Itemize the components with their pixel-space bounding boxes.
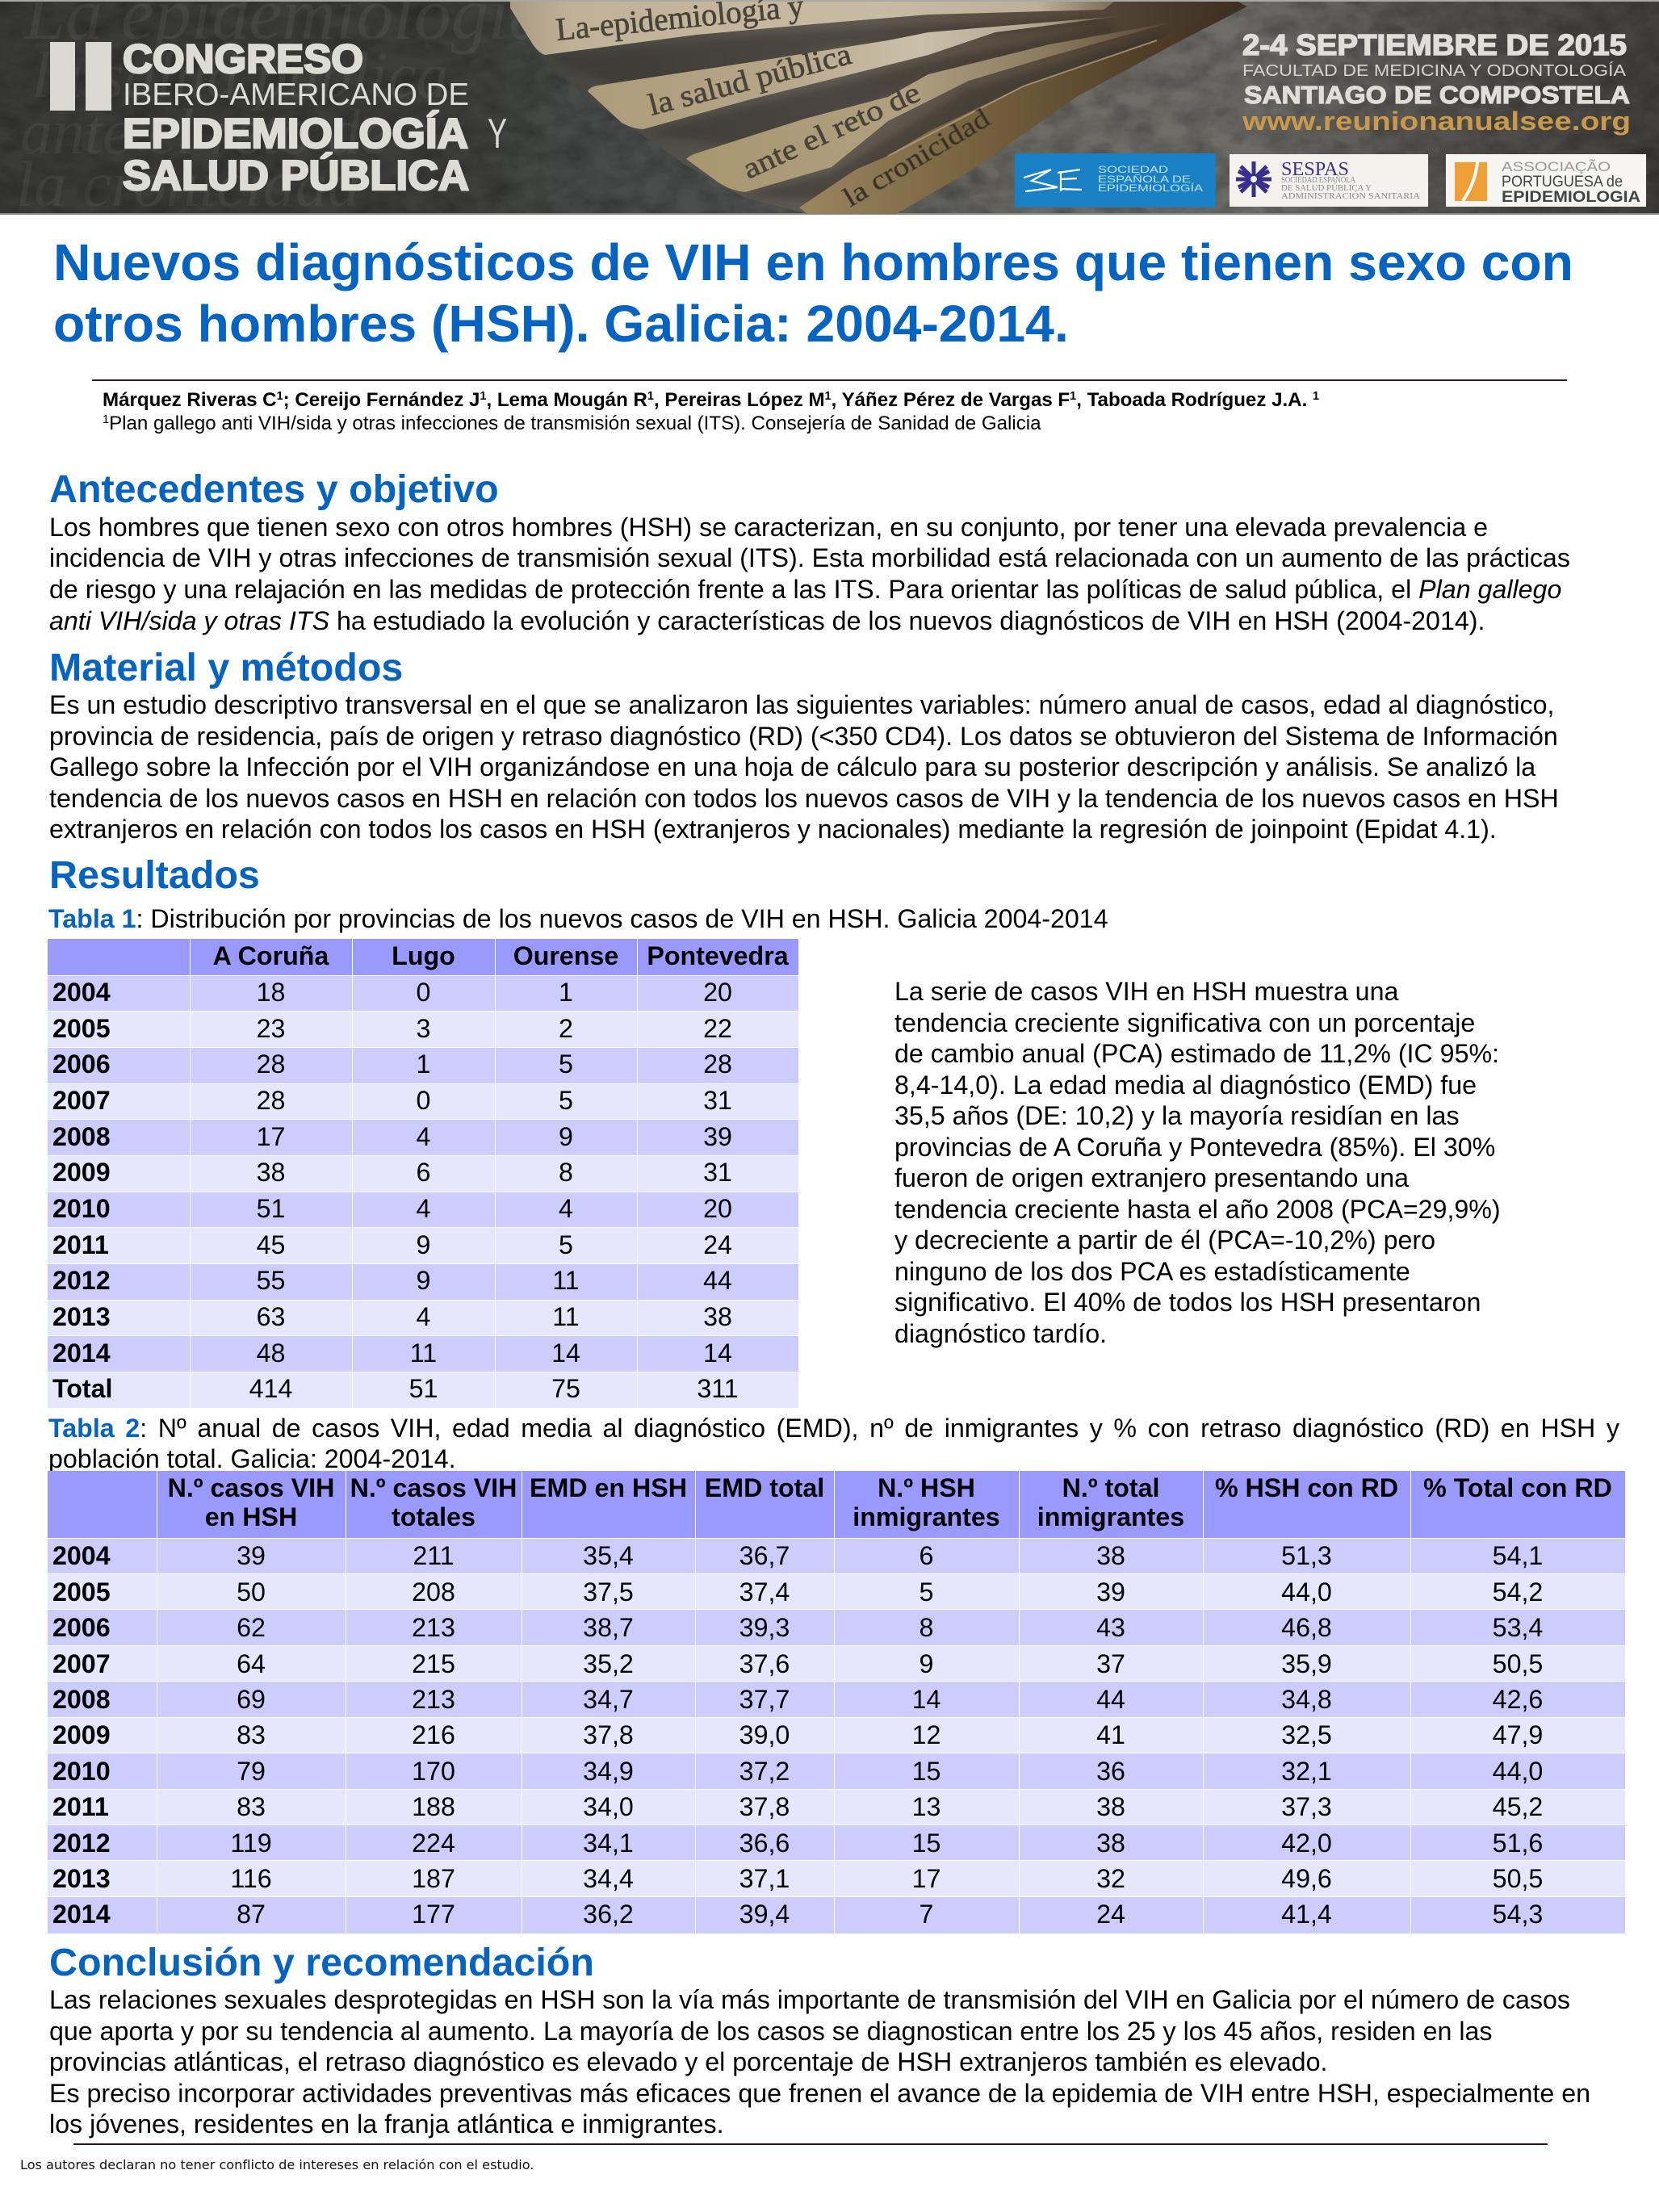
table 1: provinces: 2 xyxy=(559,1014,573,1043)
table 1: provinces: 4 xyxy=(559,1194,573,1223)
table 1: provinces: 51 xyxy=(409,1374,438,1403)
table 2: annual cases: 37,3 xyxy=(1281,1792,1332,1821)
authors and affiliation: 1 xyxy=(647,390,654,403)
table 2: annual cases: N.º casos VIH xyxy=(168,1473,334,1502)
table 2: annual cases: 2005 xyxy=(52,1577,111,1607)
table 2: annual cases: 187 xyxy=(412,1864,455,1893)
table 2: annual cases: 213 xyxy=(412,1685,455,1714)
text: resultados summary xyxy=(894,977,1501,1348)
table 2: annual cases: 54,2 xyxy=(1493,1577,1543,1607)
authors and affiliation xyxy=(92,379,1567,434)
authors and affiliation: 1 xyxy=(825,390,832,403)
table 2: annual cases: 32,5 xyxy=(1281,1720,1332,1749)
table 2: annual cases: EMD total xyxy=(705,1473,824,1502)
text: material y métodos: provincia de residencia, país de origen y retraso diagnóstico (RD) (<350 CD4). Los datos se obtuvieron del Sistema de Información xyxy=(49,722,1558,751)
table 1: provinces: Ourense xyxy=(513,941,618,970)
text: conclusión: Es preciso incorporar actividades preventivas más eficaces que frenen el avance de la epidemia de VIH entre HSH, especialmente en xyxy=(49,2079,1590,2108)
table 1: provinces: 414 xyxy=(249,1374,292,1403)
logo: APE xyxy=(1446,154,1646,207)
logo: SESPAS: SOCIEDAD ESPAÑOLA xyxy=(1281,175,1355,185)
table 1: provinces: 9 xyxy=(559,1122,573,1151)
table 1: provinces: 44 xyxy=(703,1266,732,1295)
table 2: annual cases: 39,0 xyxy=(739,1720,790,1749)
table 2: annual cases: 24 xyxy=(1096,1900,1125,1929)
table 1: provinces: 4 xyxy=(417,1194,430,1223)
table 2: annual cases: EMD en HSH xyxy=(530,1473,687,1502)
table 1: provinces: 48 xyxy=(257,1339,285,1368)
text: antecedentes: de riesgo y una relajación en las medidas de protección frente a las ITS. Para orientar las políticas de salud pública, el Plan gallego xyxy=(49,575,1561,604)
congress name: CONGRESO xyxy=(123,36,363,82)
table 1: provinces: 2014 xyxy=(52,1339,111,1368)
authors and affiliation: Márquez Riveras C xyxy=(103,389,277,411)
table 1: provinces: 20 xyxy=(703,1194,732,1223)
table 2: annual cases: 39,3 xyxy=(739,1613,790,1642)
table 2: annual cases: 54,1 xyxy=(1493,1541,1543,1570)
table 2: annual cases: 211 xyxy=(413,1541,455,1570)
table 1: provinces: 24 xyxy=(703,1230,732,1259)
table 1: provinces: 9 xyxy=(417,1266,430,1295)
table 2: annual cases: 36,2 xyxy=(583,1900,634,1929)
table 2: annual cases: 215 xyxy=(412,1649,455,1678)
table 2: annual cases: 39 xyxy=(1096,1577,1125,1607)
background script lettering xyxy=(16,0,547,220)
table 2: annual cases: 37,4 xyxy=(739,1577,790,1607)
table 2: annual cases: 32,1 xyxy=(1281,1757,1332,1786)
table 1: provinces: 2006 xyxy=(52,1049,111,1079)
table 1: provinces: Pontevedra xyxy=(647,941,789,970)
table 1: provinces: 5 xyxy=(559,1230,573,1259)
table 1: provinces: 2007 xyxy=(52,1086,111,1115)
table 1: provinces: 3 xyxy=(417,1014,430,1043)
authors and affiliation: 1 xyxy=(103,413,109,426)
caption: Tabla 2: Tabla 2: Nº anual de casos VIH, edad media al diagnóstico (EMD), nº de inmigrantes y % con retraso diagnóstico (RD) en HSH y población total. Galicia: 2004-2014. xyxy=(48,1414,1619,1473)
text: conclusión: los jóvenes, residentes en la franja atlántica e inmigrantes. xyxy=(49,2109,724,2139)
text: material y métodos: extranjeros en relación con todos los casos en HSH (extranjeros y nacionales) mediante la regresión de joinpoint (Epidat 4.1). xyxy=(49,815,1497,844)
logo: SEE: EPIDEMIOLOGÍA xyxy=(1098,182,1203,194)
congress name: IBERO-AMERICANO DE xyxy=(123,78,469,112)
table 2: annual cases: 177 xyxy=(412,1900,455,1929)
text: conclusión: que aporta y por su tendencia al aumento. La mayoría de los casos se diagnostican entre los 25 y los 45 años, residen en las xyxy=(49,2017,1493,2046)
authors and affiliation: 1 xyxy=(277,390,283,403)
table 1: provinces: 17 xyxy=(257,1122,285,1151)
table 2: annual cases: 53,4 xyxy=(1493,1613,1543,1642)
table 1: provinces: 31 xyxy=(703,1158,732,1187)
table 2: annual cases: 2014 xyxy=(52,1900,111,1929)
table 1: provinces: 55 xyxy=(257,1266,285,1295)
table 2: annual cases: 36,6 xyxy=(739,1829,790,1858)
logo: APE: ASSOCIAÇÃO xyxy=(1502,159,1611,174)
table 2: annual cases: 45,2 xyxy=(1493,1792,1543,1821)
table 1: provinces: 39 xyxy=(703,1122,732,1151)
table 1: provinces xyxy=(48,939,798,1408)
text: conclusión: Las relaciones sexuales desprotegidas en HSH son la vía más importante de transmisión del VIH en Galicia por el número de casos xyxy=(49,1985,1570,2014)
logo: APE: EPIDEMIOLOGIA xyxy=(1502,189,1640,206)
table 1: provinces: 2009 xyxy=(52,1158,111,1187)
table 2: annual cases: N.º total xyxy=(1062,1473,1159,1502)
table 2: annual cases: 83 xyxy=(237,1792,266,1821)
scallop shell ribs xyxy=(510,2,1247,214)
table 1: provinces: 22 xyxy=(703,1014,732,1043)
table 2: annual cases: inmigrantes xyxy=(1037,1502,1184,1531)
text: resultados summary: de cambio anual (PCA) estimado de 11,2% (IC 95%: xyxy=(894,1039,1499,1068)
congress date and venue: www.reunionanualsee.org xyxy=(1242,107,1631,136)
text: antecedentes: anti VIH/sida y otras ITS ha estudiado la evolución y características de los nuevos diagnósticos de VIH en HSH (2004-2014). xyxy=(49,606,1485,635)
text: antecedentes: incidencia de VIH y otras infecciones de transmisión sexual (ITS). Esta morbilidad está relacionada con un aumento de las prácticas xyxy=(49,543,1570,572)
table 1: provinces: 0 xyxy=(417,978,430,1007)
shell inscriptions: la cronicidad xyxy=(838,103,995,213)
congress date and venue xyxy=(1242,28,1631,136)
table 1: provinces: 4 xyxy=(417,1302,430,1331)
shell inscriptions: ante el reto de xyxy=(738,76,925,185)
table 1: provinces: 63 xyxy=(257,1302,285,1331)
table 2: annual cases: 44 xyxy=(1096,1685,1125,1714)
heading: Conclusión y recomendación: Conclusión y recomendación xyxy=(49,1941,594,1984)
table 2: annual cases: 5 xyxy=(920,1577,933,1607)
table 2: annual cases: 7 xyxy=(920,1900,933,1929)
table 2: annual cases: N.º HSH xyxy=(878,1473,975,1502)
table 2: annual cases: 50 xyxy=(237,1577,266,1607)
table 2: annual cases: 12 xyxy=(912,1720,941,1749)
table 1: provinces: 11 xyxy=(410,1339,437,1368)
table 1: provinces: Total xyxy=(52,1374,113,1403)
table 2: annual cases: 35,2 xyxy=(583,1649,634,1678)
table 2: annual cases: 47,9 xyxy=(1493,1720,1543,1749)
table 2: annual cases: 15 xyxy=(912,1829,941,1858)
logo: SESPAS xyxy=(1230,154,1428,207)
authors and affiliation: , Lema Mougán R xyxy=(486,389,647,411)
title: otros hombres (HSH). Galicia: 2004-2014. xyxy=(53,295,1069,353)
heading: Resultados: Resultados xyxy=(49,853,260,897)
table 1: provinces: 311 xyxy=(697,1374,739,1403)
table 2: annual cases: 34,7 xyxy=(583,1685,634,1714)
text: conclusión: provincias atlánticas, el retraso diagnóstico es elevado y el porcentaje de HSH extranjeros también es elevado. xyxy=(49,2047,1327,2076)
congress name: Y xyxy=(488,111,507,157)
table 1: provinces: 5 xyxy=(559,1086,573,1115)
table 1: provinces: 4 xyxy=(417,1122,430,1151)
congress name: SALUD PÚBLICA xyxy=(123,153,469,199)
table 2: annual cases: 39 xyxy=(237,1541,266,1570)
logo: SEE xyxy=(1015,153,1216,207)
table 2: annual cases: 32 xyxy=(1096,1864,1125,1893)
table 2: annual cases: 46,8 xyxy=(1281,1613,1332,1642)
table 2: annual cases: 41,4 xyxy=(1281,1900,1332,1929)
text: antecedentes xyxy=(49,513,1570,635)
table 1: provinces: 2004 xyxy=(52,978,111,1007)
title: Nuevos diagnósticos de VIH en hombres que tienen sexo con xyxy=(53,233,1573,291)
text: resultados summary: tendencia creciente hasta el año 2008 (PCA=29,9%) xyxy=(894,1195,1501,1224)
heading: Antecedentes y objetivo: Antecedentes y objetivo xyxy=(49,467,499,511)
table 1: provinces: 75 xyxy=(551,1374,580,1403)
table 2: annual cases: 49,6 xyxy=(1281,1864,1332,1893)
table 2: annual cases: 39,4 xyxy=(739,1900,790,1929)
table 2: annual cases: 9 xyxy=(920,1649,933,1678)
table 2: annual cases: 170 xyxy=(412,1757,455,1786)
table 2: annual cases: 8 xyxy=(920,1613,933,1642)
text: conclusión xyxy=(49,1985,1590,2139)
authors and affiliation: 1 xyxy=(1313,390,1319,403)
congress date and venue: 2-4 SEPTIEMBRE DE 2015 xyxy=(1242,28,1627,61)
table 2: annual cases: 216 xyxy=(412,1720,455,1749)
table 1: provinces: 6 xyxy=(417,1158,430,1187)
table 1: provinces: 28 xyxy=(257,1086,285,1115)
authors and affiliation: 1 xyxy=(480,390,486,403)
caption: Tabla 1: Tabla 1: Distribución por provincias de los nuevos casos de VIH en HSH. Galicia 2004-2014 xyxy=(48,904,1108,933)
table 1: provinces: 5 xyxy=(559,1049,573,1079)
background script lettering: la salud pública xyxy=(32,40,449,111)
table 2: annual cases: 116 xyxy=(230,1864,272,1893)
text: resultados summary: La serie de casos VIH en HSH muestra una xyxy=(894,977,1398,1006)
table 2: annual cases: 44,0 xyxy=(1281,1577,1332,1607)
text: material y métodos xyxy=(49,690,1559,844)
text: resultados summary: fueron de origen extranjero presentando una xyxy=(894,1163,1409,1192)
title xyxy=(53,233,1573,353)
table 2: annual cases: 2012 xyxy=(52,1829,111,1858)
table 2: annual cases: 17 xyxy=(912,1864,941,1893)
table 2: annual cases: 37,8 xyxy=(739,1792,790,1821)
table 1: provinces: 2010 xyxy=(52,1194,111,1223)
text: material y métodos: Gallego sobre la Infección por el VIH organizándose en una hoja de cálculo para su posterior descripción y análisis. Se analizó la xyxy=(49,752,1535,781)
table 2: annual cases: 2004 xyxy=(52,1541,111,1570)
table 2: annual cases: 37,8 xyxy=(583,1720,634,1749)
table 1: provinces: 0 xyxy=(417,1086,430,1115)
table 2: annual cases: 14 xyxy=(912,1685,941,1714)
table 2: annual cases: 42,0 xyxy=(1281,1829,1332,1858)
authors and affiliation: ; Cereijo Fernández J xyxy=(283,389,480,411)
table 1: provinces: 1 xyxy=(417,1049,430,1079)
logo: SESPAS: ADMINISTRACIÓN SANITARIA xyxy=(1281,191,1420,201)
authors and affiliation: , Taboada Rodríguez J.A. xyxy=(1076,389,1313,411)
shell inscriptions: la salud pública xyxy=(645,37,855,123)
table 2: annual cases: % Total con RD xyxy=(1423,1473,1612,1502)
table 2: annual cases: 87 xyxy=(237,1900,266,1929)
table 1: provinces: 2012 xyxy=(52,1266,111,1295)
table 1: provinces: 11 xyxy=(552,1266,580,1295)
table 1: provinces: 38 xyxy=(703,1302,732,1331)
background script lettering: ante el reto de xyxy=(20,97,389,168)
table 2: annual cases: 2008 xyxy=(52,1685,111,1714)
table 1: provinces: A Coruña xyxy=(213,941,329,970)
table 1: provinces: 23 xyxy=(257,1014,285,1043)
table 2: annual cases xyxy=(48,1471,1625,1933)
table 1: provinces: 8 xyxy=(559,1158,573,1187)
table 2: annual cases: 51,3 xyxy=(1281,1541,1332,1570)
congress name xyxy=(123,36,507,199)
text: resultados summary: 8,4-14,0). La edad media al diagnóstico (EMD) fue xyxy=(894,1070,1477,1100)
table 2: annual cases: 36 xyxy=(1096,1757,1125,1786)
text: material y métodos: tendencia de los nuevos casos en HSH en relación con todos los nuevos casos de VIH y la tendencia de los nuevos casos en HSH xyxy=(49,784,1559,813)
authors and affiliation: 1 xyxy=(1070,390,1076,403)
table 2: annual cases: 64 xyxy=(237,1649,266,1678)
table 2: annual cases: 42,6 xyxy=(1493,1685,1543,1714)
table 2: annual cases: 50,5 xyxy=(1493,1864,1543,1893)
table 2: annual cases: totales xyxy=(392,1502,475,1531)
table 2: annual cases: 41 xyxy=(1096,1720,1125,1749)
table 2: annual cases: 224 xyxy=(412,1829,455,1858)
table 2: annual cases: 2011 xyxy=(52,1792,109,1821)
congress name: EPIDEMIOLOGÍA xyxy=(123,111,468,157)
table 2: annual cases: 34,9 xyxy=(583,1757,634,1786)
table 2: annual cases: 13 xyxy=(912,1792,941,1821)
congress date and venue: SANTIAGO DE COMPOSTELA xyxy=(1244,81,1630,109)
table 1: provinces: 31 xyxy=(703,1086,732,1115)
table 1: provinces: 2013 xyxy=(52,1302,111,1331)
text: resultados summary: y decreciente a partir de él (PCA=-10,2%) pero xyxy=(894,1225,1435,1255)
table 2: annual cases: 37,6 xyxy=(739,1649,790,1678)
table 2: annual cases: 37,7 xyxy=(739,1685,790,1714)
table 2: annual cases: 15 xyxy=(912,1757,941,1786)
table 2: annual cases: 37 xyxy=(1096,1649,1125,1678)
table 2: annual cases: N.º casos VIH xyxy=(350,1473,517,1502)
table 1: provinces: 2011 xyxy=(52,1230,109,1259)
table 2: annual cases: 35,4 xyxy=(583,1541,634,1570)
table 2: annual cases: 38,7 xyxy=(583,1613,634,1642)
table 1: provinces: 28 xyxy=(703,1049,732,1079)
table 2: annual cases: 50,5 xyxy=(1493,1649,1543,1678)
table 2: annual cases: % HSH con RD xyxy=(1215,1473,1398,1502)
table 2: annual cases: 34,4 xyxy=(583,1864,634,1893)
table 2: annual cases: inmigrantes xyxy=(853,1502,1000,1531)
table 2: annual cases: 36,7 xyxy=(739,1541,790,1570)
table 2: annual cases: 69 xyxy=(237,1685,266,1714)
table 2: annual cases: 2010 xyxy=(52,1757,111,1786)
table 1: provinces: 45 xyxy=(257,1230,285,1259)
table 2: annual cases: 188 xyxy=(412,1792,455,1821)
table 1: provinces: 2008 xyxy=(52,1122,111,1151)
authors and affiliation: Plan gallego anti VIH/sida y otras infecciones de transmisión sexual (ITS). Consejería de Sanidad de Galicia xyxy=(109,413,1041,434)
table 2: annual cases: 62 xyxy=(237,1613,266,1642)
congress date and venue: FACULTAD DE MEDICINA Y ODONTOLOGÍA xyxy=(1242,61,1627,80)
table 2: annual cases: 34,1 xyxy=(583,1829,634,1858)
table 2: annual cases: 2013 xyxy=(52,1864,111,1893)
table 2: annual cases: 34,8 xyxy=(1281,1685,1332,1714)
table 2: annual cases: 34,0 xyxy=(583,1792,634,1821)
text: resultados summary: 35,5 años (DE: 10,2) y la mayoría residían en las xyxy=(894,1101,1460,1130)
table 2: annual cases: 43 xyxy=(1096,1613,1125,1642)
logo: SESPAS: SESPAS xyxy=(1281,159,1349,180)
table 2: annual cases: en HSH xyxy=(205,1502,297,1531)
text: resultados summary: ninguno de los dos PCA es estadísticamente xyxy=(894,1257,1410,1286)
table 1: provinces: 2005 xyxy=(52,1014,111,1043)
text: resultados summary: significativo. El 40% de todos los HSH presentaron xyxy=(894,1288,1481,1317)
table 2: annual cases: 38 xyxy=(1096,1792,1125,1821)
congress numeral II xyxy=(50,42,111,111)
table 2: annual cases: 54,3 xyxy=(1493,1900,1543,1929)
table 2: annual cases: 38 xyxy=(1096,1829,1125,1858)
authors and affiliation: , Pereiras López M xyxy=(654,389,825,411)
logo: SEE: SOCIEDAD xyxy=(1098,164,1168,175)
table 1: provinces: 38 xyxy=(257,1158,285,1187)
heading: Material y métodos: Material y métodos xyxy=(49,646,403,689)
table 2: annual cases: 37,5 xyxy=(583,1577,634,1607)
table 2: annual cases: 79 xyxy=(237,1757,266,1786)
table 2: annual cases: 213 xyxy=(412,1613,455,1642)
table 2: annual cases: 119 xyxy=(230,1829,272,1858)
table 2: annual cases: 2007 xyxy=(52,1649,111,1678)
table 1: provinces: 20 xyxy=(703,978,732,1007)
table 2: annual cases: 83 xyxy=(237,1720,266,1749)
table 2: annual cases: 37,1 xyxy=(739,1864,790,1893)
table 2: annual cases: 208 xyxy=(412,1577,455,1607)
table 2: annual cases: 38 xyxy=(1096,1541,1125,1570)
table 1: provinces: 28 xyxy=(257,1049,285,1079)
logo: SEE: ESPAÑOLA DE xyxy=(1098,174,1191,185)
table 2: annual cases: 2006 xyxy=(52,1613,111,1642)
authors and affiliation: , Yáñez Pérez de Vargas F xyxy=(832,389,1070,411)
table 2: annual cases: 35,9 xyxy=(1281,1649,1332,1678)
table 1: provinces: Lugo xyxy=(392,941,455,970)
text: resultados summary: tendencia creciente significativa con un porcentaje xyxy=(894,1008,1475,1037)
table 2: annual cases: 37,2 xyxy=(739,1757,790,1786)
table 2: annual cases: 51,6 xyxy=(1493,1829,1543,1858)
table 2: annual cases: 6 xyxy=(920,1541,933,1570)
table 2: annual cases: 44,0 xyxy=(1493,1757,1543,1786)
table 1: provinces: 14 xyxy=(551,1339,580,1368)
table 1: provinces: 14 xyxy=(703,1339,732,1368)
table 1: provinces: 18 xyxy=(257,978,285,1007)
table 1: provinces: 9 xyxy=(417,1230,430,1259)
text: resultados summary: provincias de A Coruña y Pontevedra (85%). El 30% xyxy=(894,1133,1495,1162)
text: antecedentes: Los hombres que tienen sexo con otros hombres (HSH) se caracterizan, en su conjunto, por tener una elevada prevalencia e xyxy=(49,513,1488,542)
table 1: provinces: 11 xyxy=(552,1302,580,1331)
footer note: Los autores declaran no tener conflicto de intereses en relación con el estudio. xyxy=(20,2157,534,2172)
text: material y métodos: Es un estudio descriptivo transversal en el que se analizaron las siguientes variables: número anual de casos, edad al diagnóstico, xyxy=(49,690,1554,719)
logo: APE: PORTUGUESA de xyxy=(1502,174,1623,191)
banner: congress header xyxy=(0,0,1659,216)
table 2: annual cases: 2009 xyxy=(52,1720,111,1749)
shell inscriptions xyxy=(554,0,995,213)
table 1: provinces: 51 xyxy=(257,1194,285,1223)
text: resultados summary: diagnóstico tardío. xyxy=(894,1319,1107,1348)
table 1: provinces: 1 xyxy=(559,978,573,1007)
logo: SESPAS: DE SALUD PÚBLICA Y xyxy=(1281,183,1372,193)
